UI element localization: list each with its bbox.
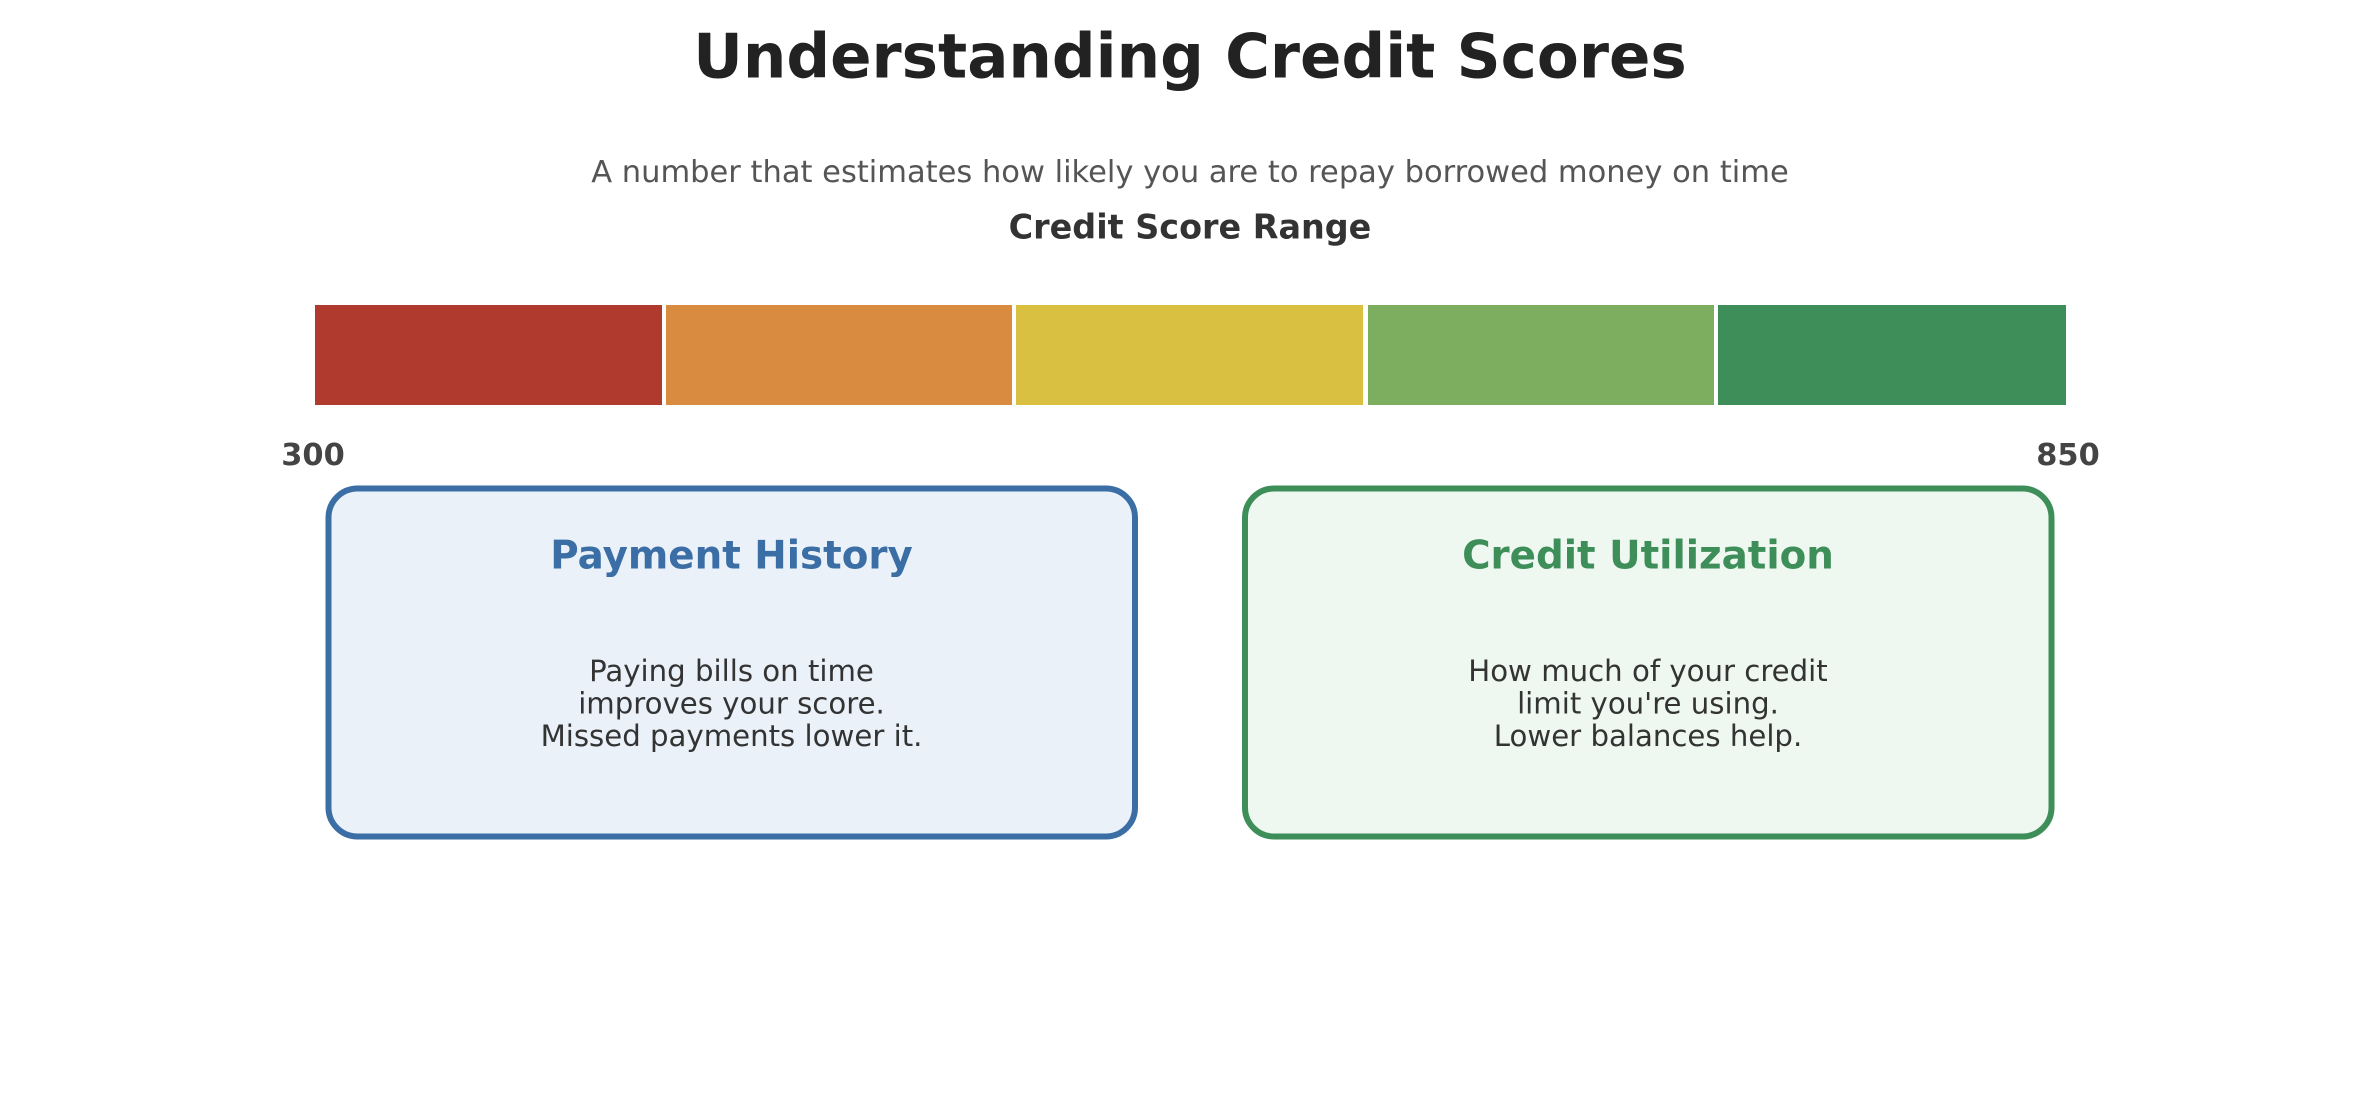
panel text: Missed payments lower it. [541,719,922,753]
segment: light green [1368,305,1714,405]
segment: yellow [1016,305,1363,405]
panel text: limit you're using. [1517,686,1779,720]
label: maximum score: 850 [2036,438,2100,473]
panel text: Paying bills on time [589,654,874,688]
panel text: How much of your credit [1468,654,1828,688]
title: Understanding Credit Scores [693,22,1687,92]
panel text: improves your score. [578,686,885,720]
panel: payment history [328,488,1135,836]
segment: dark green [1718,305,2066,405]
heading: credit score range: Credit Score Range [1009,208,1371,246]
credit score range bar [315,305,2066,405]
panel: credit utilization [1245,488,2052,836]
label: minimum score: 300 [281,438,345,473]
panel box [328,488,1135,836]
subtitle: A number that estimates how likely you are to repay borrowed money on time [591,155,1789,190]
segment: orange [666,305,1012,405]
panel heading: Credit Utilization [1462,534,1834,578]
panel box [1245,488,2052,836]
panel heading: Payment History [550,534,913,578]
panel text [541,654,922,753]
panel text: Lower balances help. [1494,719,1802,753]
segment: red [315,305,662,405]
panel text [1468,654,1828,753]
